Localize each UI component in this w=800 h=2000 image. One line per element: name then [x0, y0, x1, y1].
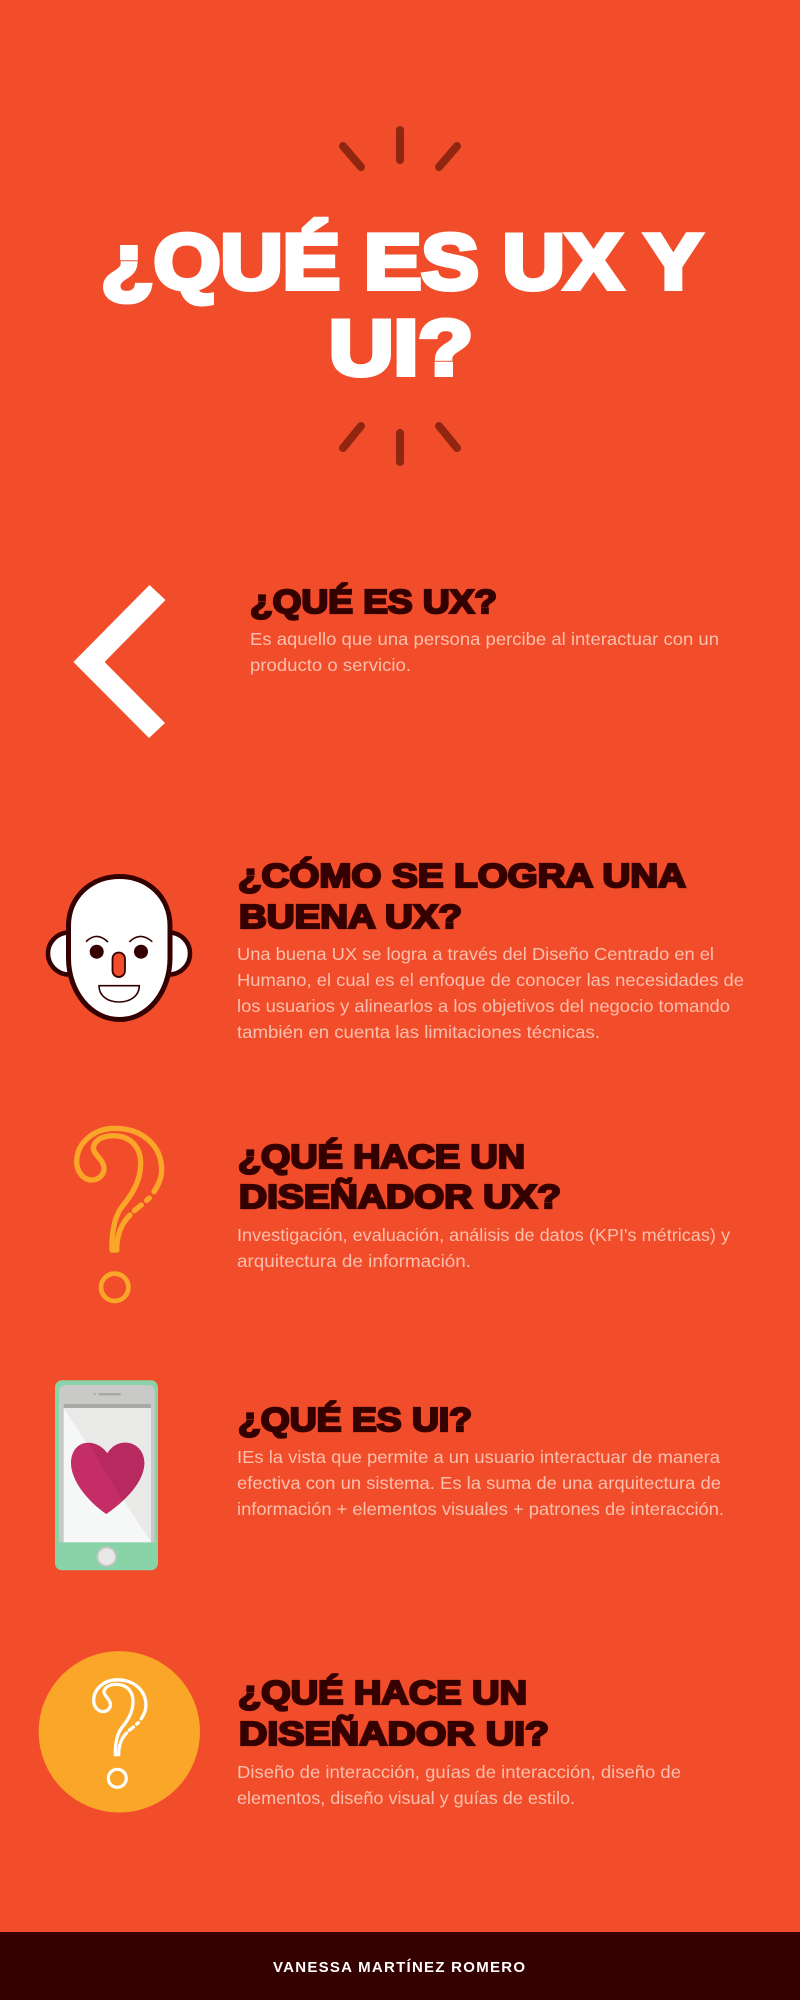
heading: how to achieve good UX: BUENA UX? [239, 898, 462, 935]
panel: what a UX designer does [77, 1128, 730, 1301]
text: what a UI designer does body: Diseño de interacción, guías de interacción, diseño de [237, 1762, 681, 1782]
text: how to achieve good UX body [237, 944, 744, 1042]
text: what a UX designer does body [237, 1225, 730, 1271]
title [101, 218, 702, 392]
title: UI? [329, 304, 473, 392]
icon: smiling face [48, 876, 190, 1020]
panel: what is UI [55, 1380, 724, 1570]
text: what a UI designer does body [237, 1762, 681, 1808]
icon: white chevron [73, 585, 166, 738]
panel: what is UX [73, 583, 719, 738]
text: what a UX designer does body: arquitectura de información. [237, 1251, 471, 1271]
footer author name: VANESSA MARTÍNEZ ROMERO [273, 1959, 527, 1976]
text: what is UI body [237, 1447, 724, 1519]
text: how to achieve good UX body: Humano, el cual es el enfoque de conocer las necesidades de [237, 970, 744, 990]
text: what a UX designer does body: Investigación, evaluación, análisis de datos (KPI's métricas) y [237, 1225, 730, 1245]
heading: what a UX designer does: DISEÑADOR UX? [239, 1178, 561, 1215]
heading: how to achieve good UX: ¿CÓMO SE LOGRA UNA [238, 857, 686, 894]
heading: what a UX designer does [238, 1138, 561, 1215]
text: what is UI body: efectiva con un sistema. Es la suma de una arquitectura de [237, 1473, 721, 1493]
text: how to achieve good UX body: los usuarios y alinearlos a los objetivos del negocio tomando [237, 996, 730, 1016]
heading: what a UX designer does: ¿QUÉ HACE UN [238, 1138, 525, 1175]
heading: what a UI designer does: DISEÑADOR UI? [239, 1715, 549, 1752]
icon: phone with heart [55, 1380, 158, 1570]
text: how to achieve good UX body: Una buena UX se logra a través del Diseño Centrado en el [237, 944, 714, 964]
title: ¿QUÉ ES UX Y [101, 218, 702, 306]
heading: what a UI designer does [238, 1674, 549, 1752]
heading: how to achieve good UX [238, 857, 686, 935]
icon: top burst rays [343, 130, 457, 167]
text: what is UX body: producto o servicio. [250, 655, 411, 675]
icon: orange circle with white question mark [39, 1651, 200, 1813]
heading: what is UX: ¿QUÉ ES UX? [250, 583, 497, 620]
text: what a UI designer does body: elementos, diseño visual y guías de estilo. [237, 1788, 575, 1808]
icon: bottom burst rays [343, 426, 457, 462]
text: what is UX body [250, 629, 719, 675]
heading: what a UI designer does: ¿QUÉ HACE UN [238, 1674, 527, 1711]
icon: orange question mark [77, 1128, 162, 1301]
text: what is UI body: IEs la vista que permite a un usuario interactuar de manera [237, 1447, 720, 1467]
text: how to achieve good UX body: también en cuenta las limitaciones técnicas. [237, 1022, 600, 1042]
panel: how to achieve good UX [48, 857, 744, 1042]
footer band [0, 1932, 800, 2000]
text: what is UX body: Es aquello que una persona percibe al interactuar con un [250, 629, 719, 649]
heading: what is UI: ¿QUÉ ES UI? [238, 1401, 472, 1438]
text: what is UI body: información + elementos visuales + patrones de interacción. [237, 1499, 724, 1519]
panel: what a UI designer does [39, 1651, 681, 1813]
